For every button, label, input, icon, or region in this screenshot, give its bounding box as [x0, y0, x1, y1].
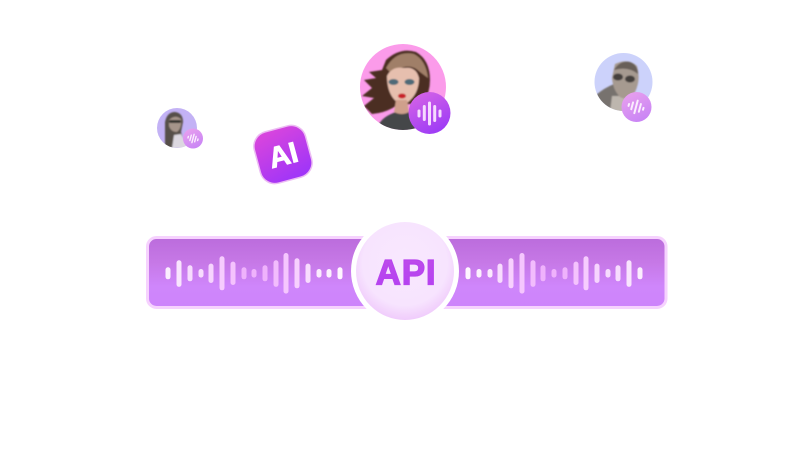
audio badge	[622, 92, 652, 122]
waveform left	[166, 253, 342, 294]
audio badge	[408, 92, 450, 134]
waveform right	[466, 253, 642, 294]
avatar: man with braids and sunglasses	[157, 108, 203, 148]
avatar: woman with brown hair	[360, 44, 450, 134]
API hub circle	[351, 217, 459, 325]
AI tile icon	[251, 122, 315, 187]
API label: API	[376, 254, 436, 292]
audio bar panel	[148, 238, 666, 308]
avatar: man with sunglasses	[594, 53, 652, 122]
audio badge	[183, 128, 203, 148]
AI label: AI	[265, 137, 302, 175]
